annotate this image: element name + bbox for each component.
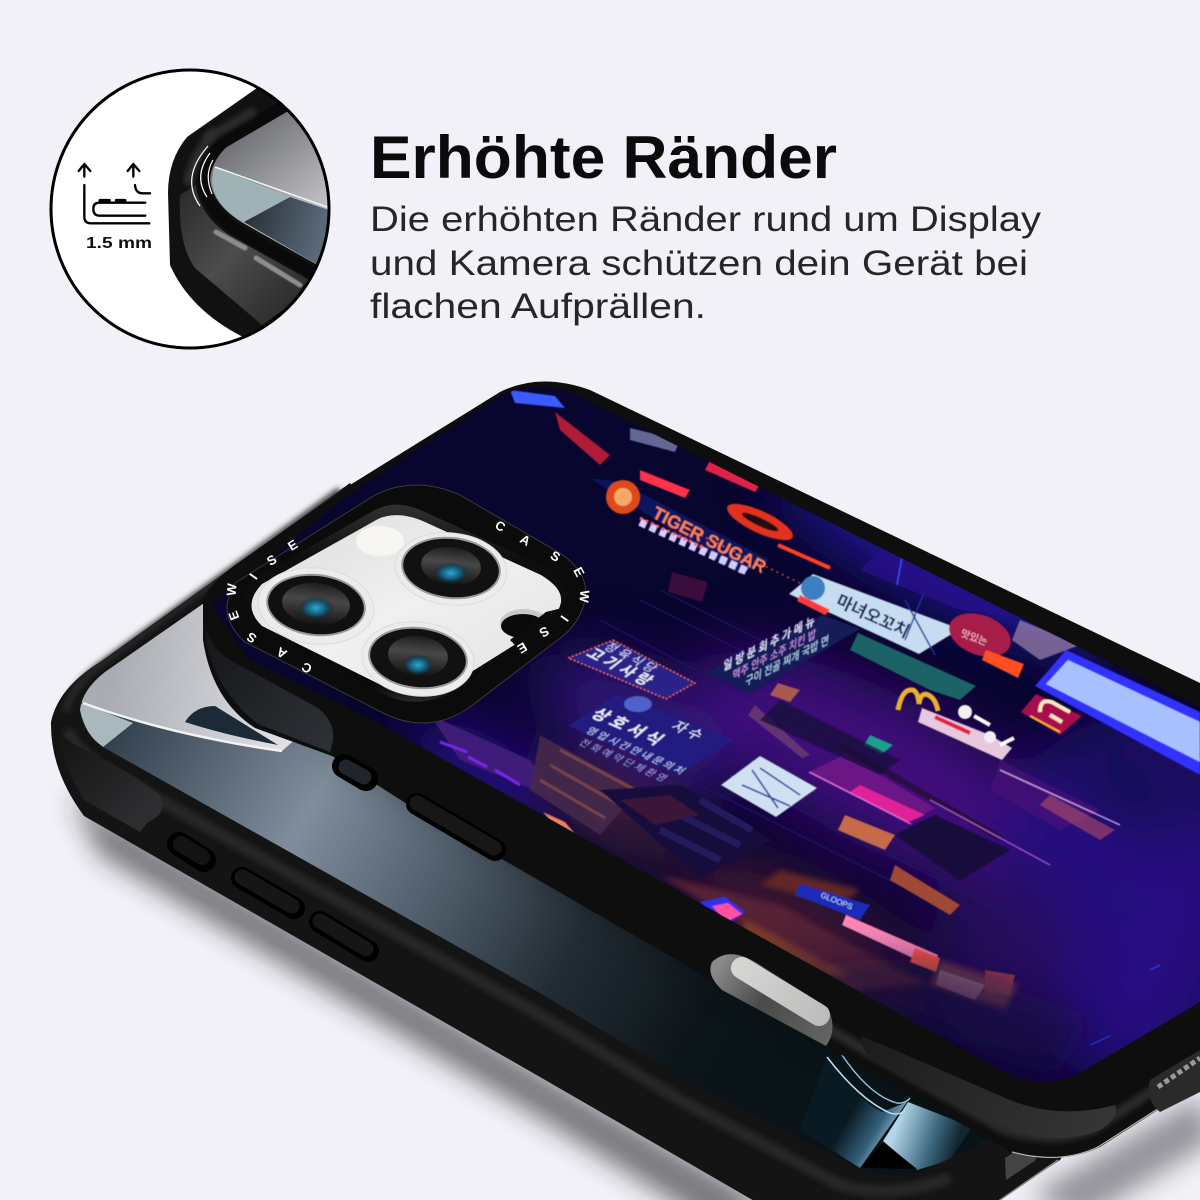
body text — [370, 200, 1042, 326]
lower phone glass — [80, 604, 986, 1175]
camera bump — [224, 485, 592, 723]
sign: tiger sugar: TIGER SUGAR — [649, 503, 770, 577]
purple hatch below camera — [430, 715, 560, 800]
label: 1.5 mm: 1.5 mm — [86, 235, 152, 252]
sign: neon pink ring — [700, 896, 746, 922]
translucent corner: bump side — [206, 628, 333, 752]
sign: small tan plates — [770, 683, 800, 702]
sign: red round: 맛있는 — [959, 628, 989, 648]
brand lettering: S — [548, 548, 563, 565]
sign: hangul board right: 맥주 안주 소주 치킨 밥 — [732, 627, 817, 683]
phone shadows — [70, 795, 1200, 1200]
sign: blue window — [1035, 650, 1200, 775]
sign: top blue neon — [510, 390, 565, 408]
building: dark block — [600, 785, 772, 878]
sign: white banner with hangul — [789, 574, 976, 700]
glass dark lower — [244, 197, 335, 272]
lidar sensor — [500, 609, 548, 638]
translucent band — [180, 185, 318, 325]
speaker grille — [1149, 1050, 1200, 1112]
brand lettering: S — [536, 623, 552, 641]
thin blue specks — [1090, 965, 1160, 1045]
glass white line — [215, 167, 330, 208]
body text: flachen Aufprällen. — [370, 287, 706, 326]
frame inner lip — [204, 100, 325, 280]
upper phone: body with neon case — [200, 370, 1200, 1158]
shock arcs — [192, 146, 213, 206]
ambient colour glows — [394, 452, 1200, 1080]
power button upper phone — [417, 803, 495, 850]
glass pale wedge — [212, 167, 290, 222]
lower phone: rear device — [51, 440, 1100, 1200]
upper phone thin rim light — [1012, 1082, 1200, 1157]
brand lettering: I — [558, 613, 572, 624]
sign: hangul board lower — [568, 694, 735, 784]
lower phone frame — [51, 483, 1100, 1200]
brand lettering: C — [298, 659, 315, 677]
brand lettering: C — [492, 517, 509, 535]
brand lettering: E — [514, 639, 530, 657]
neon city print — [200, 370, 1200, 1100]
shop: orange panels — [838, 815, 895, 850]
brand lettering — [224, 517, 592, 677]
glass — [210, 100, 340, 272]
brand lettering: S — [244, 629, 259, 646]
lens bottom — [358, 616, 478, 702]
lower phone port — [1005, 1140, 1036, 1180]
sign: teal tile — [864, 735, 893, 754]
lower phone translucent corner — [58, 735, 162, 832]
shop: magenta neon — [809, 745, 1000, 838]
lens left — [254, 562, 378, 650]
sign: hangul board left: 고 기 사 랑 — [582, 646, 657, 688]
building: pink tiles bottom — [936, 970, 1015, 1000]
inner wall — [245, 505, 568, 702]
sign: upper right blue hatch — [860, 549, 1017, 616]
upper phone frame — [203, 381, 1200, 1158]
lower phone side button: volume up — [242, 877, 294, 908]
wallpaper light streaks — [800, 1055, 972, 1170]
silent switch upper phone — [344, 766, 366, 779]
sign: hangul board lower: 영 업 시 간 안 내 문 의 처 — [583, 725, 689, 777]
sign: red arrow — [1021, 694, 1082, 735]
body text: Die erhöhten Ränder rund um Display — [370, 200, 1042, 239]
outer black ring — [227, 485, 586, 723]
sign: hangul board right: 일 방 분 회 추 가 메 뉴 — [723, 612, 815, 674]
sign: hangul board lower: 상 호 서 식 — [587, 706, 668, 748]
sign: white strip signs — [918, 705, 1014, 760]
lower phone side button: volume down — [320, 921, 368, 951]
sign: hangul board left: 정 육 식 당 — [601, 641, 661, 675]
sign: hangul board right: 구이 전골 찌개 국밥 면 — [745, 633, 830, 689]
sign: red-dark patch — [668, 572, 708, 602]
upper phone shadow edge — [760, 990, 1200, 1137]
shop: dark shelves and window — [760, 700, 1120, 880]
sign: tiger sugar — [590, 478, 770, 577]
frame dark outer — [168, 80, 340, 340]
sign: hangul board left — [568, 640, 695, 699]
camera plate — [252, 515, 561, 695]
lower phone side button: silent switch — [179, 844, 204, 860]
brand lettering: A — [273, 644, 290, 662]
icon: raised edge diagram — [79, 164, 150, 223]
lower phone frame ridge highlight — [68, 730, 950, 1191]
sign: mcdonalds arches — [898, 690, 938, 711]
sign: hangul board lower: 자 수 — [667, 719, 707, 743]
sign: pink strip — [842, 914, 938, 958]
sign: blue labels: GLOOPS — [819, 891, 854, 912]
sign: red neon scribble — [726, 502, 794, 541]
sign: orange block — [982, 650, 1024, 678]
brand lettering: W — [576, 590, 592, 604]
sign: red round — [948, 612, 1012, 657]
brand lettering: E — [225, 609, 242, 622]
brand lettering: I — [246, 571, 260, 582]
brand lettering: W — [224, 582, 240, 596]
brand lettering: E — [570, 565, 588, 580]
silver side button — [710, 954, 833, 1046]
building: brick left — [530, 735, 636, 835]
flash — [356, 526, 404, 556]
highlight — [216, 232, 300, 285]
lower phone edge line — [1000, 1160, 1058, 1200]
sign: pale poster — [721, 756, 817, 817]
street: warm reflections — [660, 870, 1018, 1010]
lens top right — [392, 527, 510, 611]
sign: blue labels — [795, 884, 870, 920]
sign: white banner with hangul: 마녀오꼬치 — [833, 591, 912, 642]
brand lettering: A — [517, 531, 534, 549]
sign: hangul board right — [707, 612, 860, 694]
inset circle: raised edge detail — [51, 70, 340, 348]
brand lettering: E — [285, 536, 301, 554]
brand lettering: S — [264, 551, 280, 569]
dark foreground darkening — [760, 960, 1100, 1080]
circle base — [51, 70, 329, 348]
heading: Erhöhte Ränder — [370, 124, 837, 191]
ring right cover — [510, 607, 566, 650]
building texture lines — [600, 590, 1150, 925]
translucent corner: bottom right — [861, 1036, 1116, 1138]
circle outline — [51, 70, 329, 348]
sign: hangul board lower: 전 화 예 약 단 체 환 영 — [576, 737, 671, 784]
body text: und Kamera schützen dein Gerät bei — [370, 244, 1028, 283]
